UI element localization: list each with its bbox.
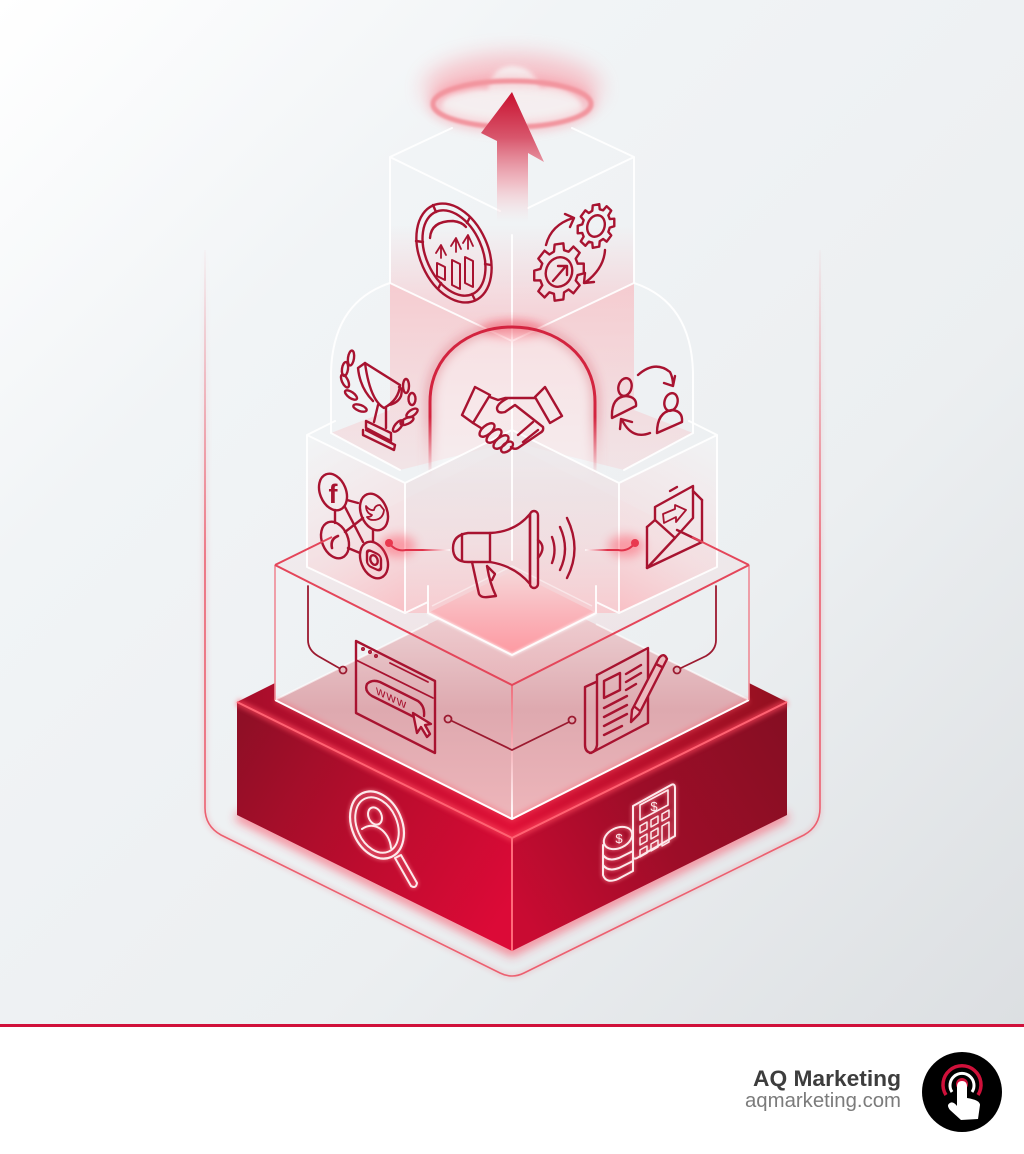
icon: calculator and coins: $	[615, 831, 623, 846]
icon: browser window	[356, 641, 435, 753]
icon: handshake	[462, 387, 562, 455]
tier: glass box edges	[275, 537, 749, 819]
icon: envelope	[647, 486, 702, 568]
tier: top cube	[390, 128, 634, 341]
connector: right email node	[585, 535, 644, 557]
icon: social network	[314, 470, 393, 582]
icon: browser window: www	[375, 682, 407, 712]
tier: three glass cubes	[307, 421, 717, 655]
icon: trophy with laurels	[339, 350, 419, 450]
brand name: AQ Marketing	[753, 1066, 901, 1091]
glowing arch	[430, 327, 595, 478]
growth arrow	[481, 92, 544, 222]
icon: social network: f	[328, 479, 338, 509]
icon: growth dial	[402, 192, 506, 314]
icon: gears and cycle arrows	[534, 201, 614, 304]
icon: calculator and coins: $	[650, 799, 658, 814]
brand url: aqmarketing.com	[745, 1090, 901, 1112]
glass box floor	[275, 445, 749, 819]
icon: magnifier with person	[340, 783, 417, 887]
footer panel	[0, 1024, 1024, 1154]
base red block	[237, 683, 787, 951]
icon: newspaper and pencil	[585, 648, 667, 753]
connector: left social node	[380, 535, 450, 557]
logo: tap icon	[922, 1052, 1002, 1132]
connectors: glass box wiring	[308, 586, 716, 750]
cloud ring with glow	[424, 54, 600, 127]
icon: people exchange	[612, 367, 682, 435]
icon: megaphone	[453, 511, 574, 597]
icon: calculator and coins	[600, 784, 675, 881]
tier: arched panels	[331, 283, 693, 470]
outer hexagon frame	[205, 250, 820, 976]
